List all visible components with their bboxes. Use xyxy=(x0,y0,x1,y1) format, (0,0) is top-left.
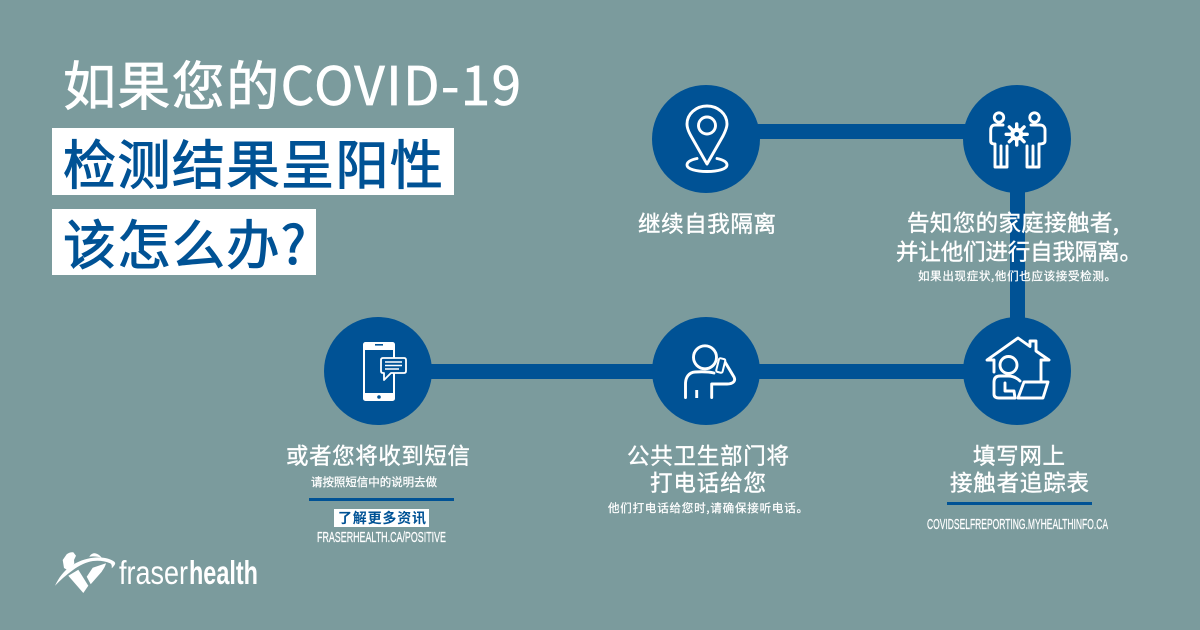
wordmark: fraser xyxy=(119,554,188,591)
divider xyxy=(309,498,454,501)
url: FRASERHEALTH.CA/POSITIVE xyxy=(317,529,446,546)
icon: two people with virus xyxy=(963,85,1071,193)
step: text message xyxy=(286,317,470,546)
label: 公共卫生部门将 xyxy=(627,439,789,471)
label line 2: 接触者追踪表 xyxy=(950,466,1089,498)
icon: person at laptop in house xyxy=(963,317,1071,425)
learn more button: 了解更多资讯 xyxy=(338,508,426,528)
title line 3 highlighted: 该怎么办? xyxy=(63,204,306,280)
icon: person on phone xyxy=(652,317,760,425)
label: 继续自我隔离 xyxy=(638,207,776,239)
label: 或者您将收到短信 xyxy=(286,439,470,471)
icon: phone with message bubble xyxy=(324,317,432,425)
icon: heart with swoosh xyxy=(55,552,115,593)
small note: 请按照短信中的说明去做 xyxy=(311,474,438,490)
label line 2: 并让他们进行自我隔离。 xyxy=(896,235,1142,267)
small note: 如果出现症状,他们也应该接受检测。 xyxy=(918,268,1116,284)
step: public health will call you xyxy=(608,317,808,516)
logo: fraser health xyxy=(55,552,258,593)
label: 填写网上 xyxy=(973,439,1065,471)
divider xyxy=(947,502,1092,505)
step: fill in the online form xyxy=(927,317,1108,533)
virus xyxy=(1006,124,1027,145)
small note: 他们打电话给您时,请确保接听电话。 xyxy=(608,500,808,516)
label: 告知您的家庭接触者, xyxy=(907,206,1119,238)
connector path xyxy=(378,124,1025,379)
title line 1: 如果您的COVID-19 xyxy=(63,45,521,121)
wordmark bold: health xyxy=(189,554,258,591)
icon: location pin xyxy=(652,85,760,193)
step: continue self isolating xyxy=(638,85,776,239)
title line 2 highlighted: 检测结果呈阳性 xyxy=(63,124,443,200)
step: tell household contacts xyxy=(896,85,1142,284)
label line 2: 打电话给您 xyxy=(650,466,766,498)
title xyxy=(52,45,521,280)
